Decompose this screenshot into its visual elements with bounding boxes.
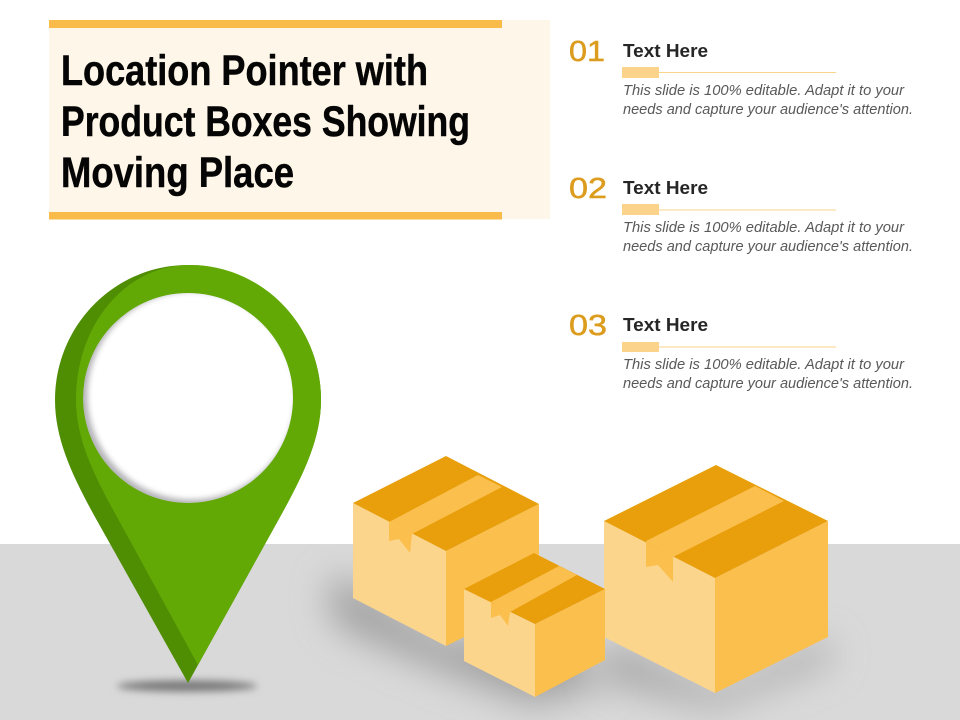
text item 03: needs and capture your audience's attention. xyxy=(623,376,913,392)
text item 01 xyxy=(569,36,913,118)
text item 03: This slide is 100% editable. Adapt it to your xyxy=(623,357,905,373)
text item 01: 01 xyxy=(569,36,605,68)
text item 02: This slide is 100% editable. Adapt it to your xyxy=(623,220,905,236)
text item 02: Text Here xyxy=(623,178,708,198)
pin hole xyxy=(83,292,296,503)
box: large left xyxy=(353,456,539,646)
pin shadow xyxy=(117,680,257,692)
location pin xyxy=(55,265,321,683)
title panel xyxy=(49,20,550,220)
text item 03: Text Here xyxy=(623,315,708,335)
ground band xyxy=(0,544,960,720)
text item 03 xyxy=(569,310,913,392)
text item 02: needs and capture your audience's attention. xyxy=(623,239,913,255)
title: Product Boxes Showing xyxy=(61,98,470,146)
text item 01: This slide is 100% editable. Adapt it to your xyxy=(623,83,905,99)
text item 02: 02 xyxy=(569,173,607,205)
box: small front xyxy=(464,553,605,697)
box shadows xyxy=(329,575,832,708)
text item 03: 03 xyxy=(569,310,607,342)
title: Location Pointer with xyxy=(61,47,428,95)
title xyxy=(61,47,470,197)
box: large right xyxy=(604,465,828,693)
text item 01: Text Here xyxy=(623,41,708,61)
text item 02 xyxy=(569,173,913,255)
title: Moving Place xyxy=(61,149,294,197)
text item 01: needs and capture your audience's attention. xyxy=(623,102,913,118)
